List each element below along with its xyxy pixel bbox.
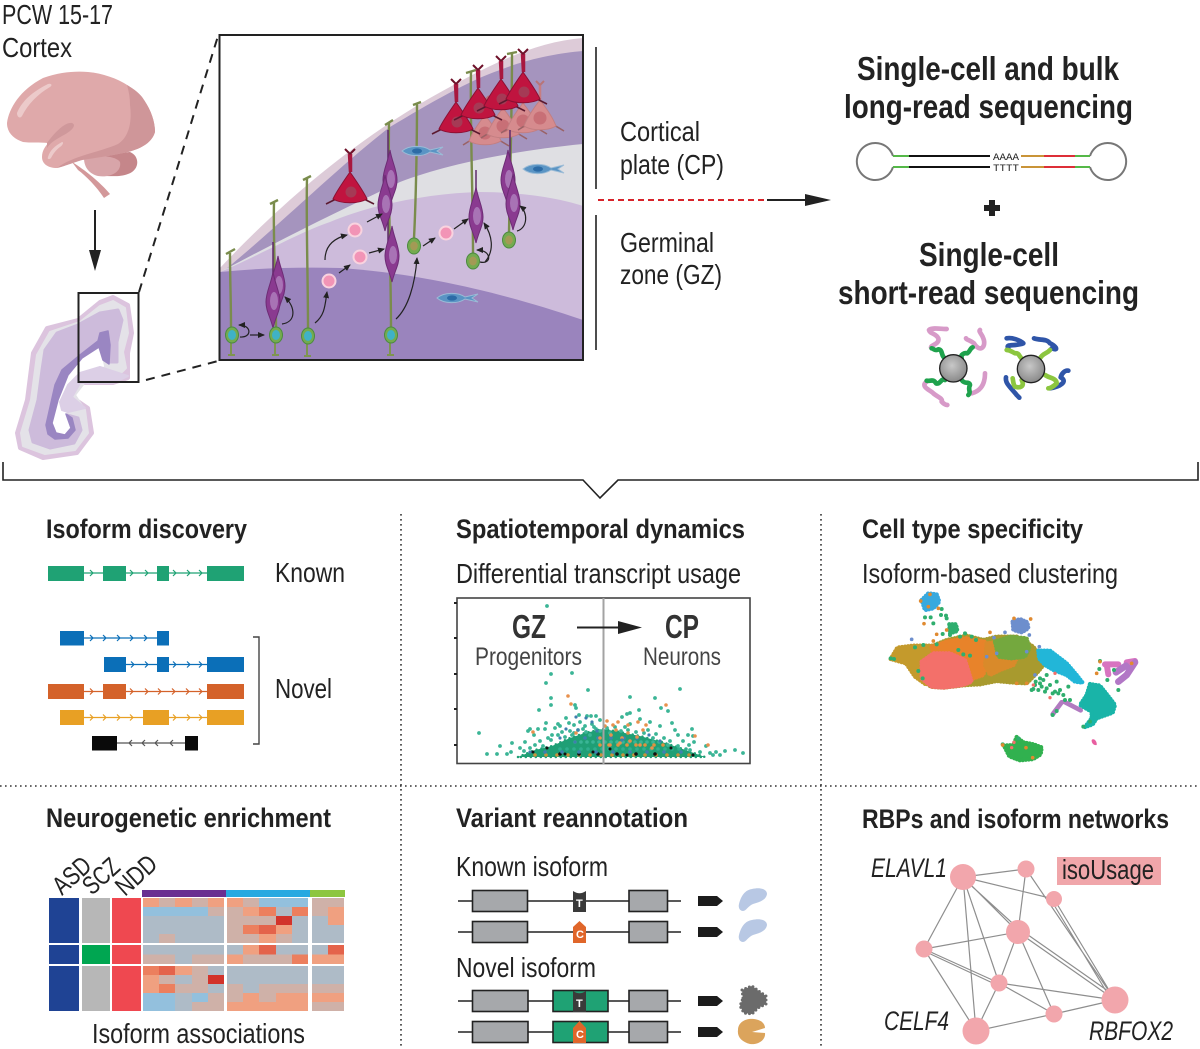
arrow: brain to section <box>89 210 101 271</box>
dense mass of points <box>518 729 705 757</box>
cells: radial glia somas <box>226 232 516 356</box>
icon: barcoded beads <box>924 328 1068 405</box>
label: Cortical plate: Cortical <box>620 116 700 147</box>
blue top cluster <box>922 593 939 610</box>
label: known isoform: Known isoform <box>456 851 608 882</box>
scattered blue and dark points <box>530 717 660 752</box>
rotated labels <box>46 848 163 901</box>
salmon region <box>922 653 972 688</box>
novel isoform: blue 2 <box>104 657 244 672</box>
heading: Cell type specificity <box>862 514 1083 544</box>
plus sign <box>984 200 1000 216</box>
heading: Spatiotemporal dynamics <box>456 514 745 544</box>
label: known: Known <box>275 557 345 588</box>
rotated labels: NDD <box>109 848 163 901</box>
centre line <box>602 598 604 764</box>
label: PCW 15-17 Cortex <box>2 0 113 63</box>
slate blue cluster <box>1013 619 1028 632</box>
heading: Variant reannotation <box>456 803 688 833</box>
cyan cluster <box>1038 651 1083 683</box>
novel isoform: blue 1 <box>60 631 169 646</box>
cells: intermediate progenitors <box>322 222 454 288</box>
novel isoform: black <box>92 736 198 750</box>
novel bracket <box>253 637 259 744</box>
magenta ring <box>1105 661 1135 674</box>
subheading: Isoform-based clustering <box>862 558 1118 589</box>
pale salmon cells <box>143 898 344 1011</box>
label: PCW 15-17 Cortex: Cortex <box>2 32 72 63</box>
icon: long-read hairpin: TTTT <box>993 164 1019 175</box>
red cells <box>208 916 292 984</box>
overlay colours in the dense mass <box>535 738 700 755</box>
radial glia fibres <box>226 52 517 328</box>
green region <box>995 637 1029 658</box>
deep orange cells <box>159 925 344 975</box>
label: CP: CP <box>665 608 699 645</box>
large bracket <box>3 462 1198 498</box>
green island <box>1004 737 1042 760</box>
cells: migrating neurons <box>266 130 520 328</box>
plot frame <box>457 598 750 764</box>
heading: Neurogenetic enrichment <box>46 803 331 833</box>
axis ticks <box>454 603 457 745</box>
rotated labels: ASD <box>46 850 97 900</box>
cortical layer bands <box>220 38 583 360</box>
panel: isoform discovery <box>46 514 345 750</box>
small lineage arrows <box>239 206 526 337</box>
label: Cortical plate <box>620 116 724 180</box>
label: GZ: GZ <box>512 608 546 645</box>
teal cluster <box>1080 684 1115 727</box>
heading: single-cell and bulk long-read sequencing: long-read sequencing <box>844 88 1133 125</box>
label: RBFOX2: RBFOX2 <box>1089 1016 1173 1046</box>
disorder columns <box>49 898 141 1011</box>
network nodes <box>916 860 1128 1044</box>
heading: single-cell short-read sequencing: Single-cell <box>919 236 1059 273</box>
panel: cortical layers with cells <box>220 38 583 360</box>
base fill <box>143 898 344 1011</box>
panel: spatiotemporal dynamics <box>454 514 750 764</box>
arrow: GZ to CP <box>577 621 642 634</box>
light-blue cells <box>143 898 308 1011</box>
panel: variant reannotation <box>456 803 767 1044</box>
lilac strip <box>1053 702 1081 714</box>
rotated labels: SCZ <box>76 851 126 900</box>
volcano scatter plot <box>479 606 743 757</box>
icon: cortex section <box>17 297 132 458</box>
cells: red neurons <box>326 49 564 204</box>
panel: neurogenetic enrichment <box>46 803 345 1049</box>
olive-yellow left <box>891 646 937 685</box>
scattered teal points <box>479 606 743 755</box>
heat cells <box>143 898 344 1011</box>
scattered orange points <box>533 696 708 748</box>
frame of cortical panel <box>220 35 583 360</box>
novel isoform C row <box>458 1019 765 1044</box>
label: CELF4: CELF4 <box>884 1006 949 1036</box>
known isoform <box>48 566 244 581</box>
dashed zoom lines <box>139 36 218 380</box>
novel isoform: orange <box>48 684 244 699</box>
dotted dividers <box>0 514 1200 1049</box>
panel: RBPs and isoform networks <box>862 804 1173 1046</box>
orange region <box>932 638 987 678</box>
heading: single-cell and bulk long-read sequencing <box>844 50 1133 125</box>
cells: blue interneurons <box>402 146 564 303</box>
heat map <box>49 890 345 1011</box>
label: ELAVL1: ELAVL1 <box>871 853 947 883</box>
heading: Isoform discovery <box>46 514 247 544</box>
arrow: red dashed to sequencing <box>598 194 831 206</box>
brackets: CP and GZ <box>595 47 597 350</box>
label: Germinal zone <box>620 227 722 290</box>
icon: long-read hairpin: AAAA <box>993 153 1019 164</box>
green upper cluster <box>949 624 957 633</box>
label: neurons: Neurons <box>643 643 721 671</box>
panel: cell type specificity <box>862 514 1135 760</box>
novel isoform T row: T <box>576 998 583 1010</box>
novel isoform: yellow <box>60 710 244 725</box>
label: Germinal zone: Germinal <box>620 227 714 258</box>
main olive body <box>927 636 1045 688</box>
label: Germinal zone: zone (GZ) <box>620 259 722 290</box>
heading: single-cell and bulk long-read sequencing: Single-cell and bulk <box>857 50 1120 87</box>
label: novel: Novel <box>275 673 332 704</box>
known isoform T row: T <box>576 898 583 910</box>
label: progenitors: Progenitors <box>475 643 582 671</box>
subheading: Differential transcript usage <box>456 558 741 589</box>
legend: isoUsage: isoUsage <box>1062 854 1154 885</box>
second orange region <box>985 642 1018 675</box>
box: zoom region on section <box>78 293 138 382</box>
UMAP clusters <box>891 593 1135 760</box>
novel isoform C row: C <box>576 1029 584 1041</box>
icon: brain <box>7 72 155 198</box>
heading: single-cell short-read sequencing <box>838 236 1139 311</box>
known isoform C row <box>458 919 767 943</box>
known isoform T row <box>458 888 767 912</box>
heading: single-cell short-read sequencing: short-read sequencing <box>838 274 1139 311</box>
salmon cells <box>143 898 344 1011</box>
novel isoform T row <box>458 986 766 1014</box>
annotation colour bar <box>142 890 345 897</box>
network edges <box>924 869 1118 1031</box>
label: novel isoform: Novel isoform <box>456 952 596 983</box>
icon: long-read hairpin <box>857 143 1126 180</box>
known isoform C row: C <box>576 929 584 941</box>
scattered dots <box>891 609 1118 744</box>
label: Cortical plate: plate (CP) <box>620 149 724 180</box>
label: isoform associations: Isoform associations <box>92 1018 305 1049</box>
strong orange cells <box>143 907 308 993</box>
